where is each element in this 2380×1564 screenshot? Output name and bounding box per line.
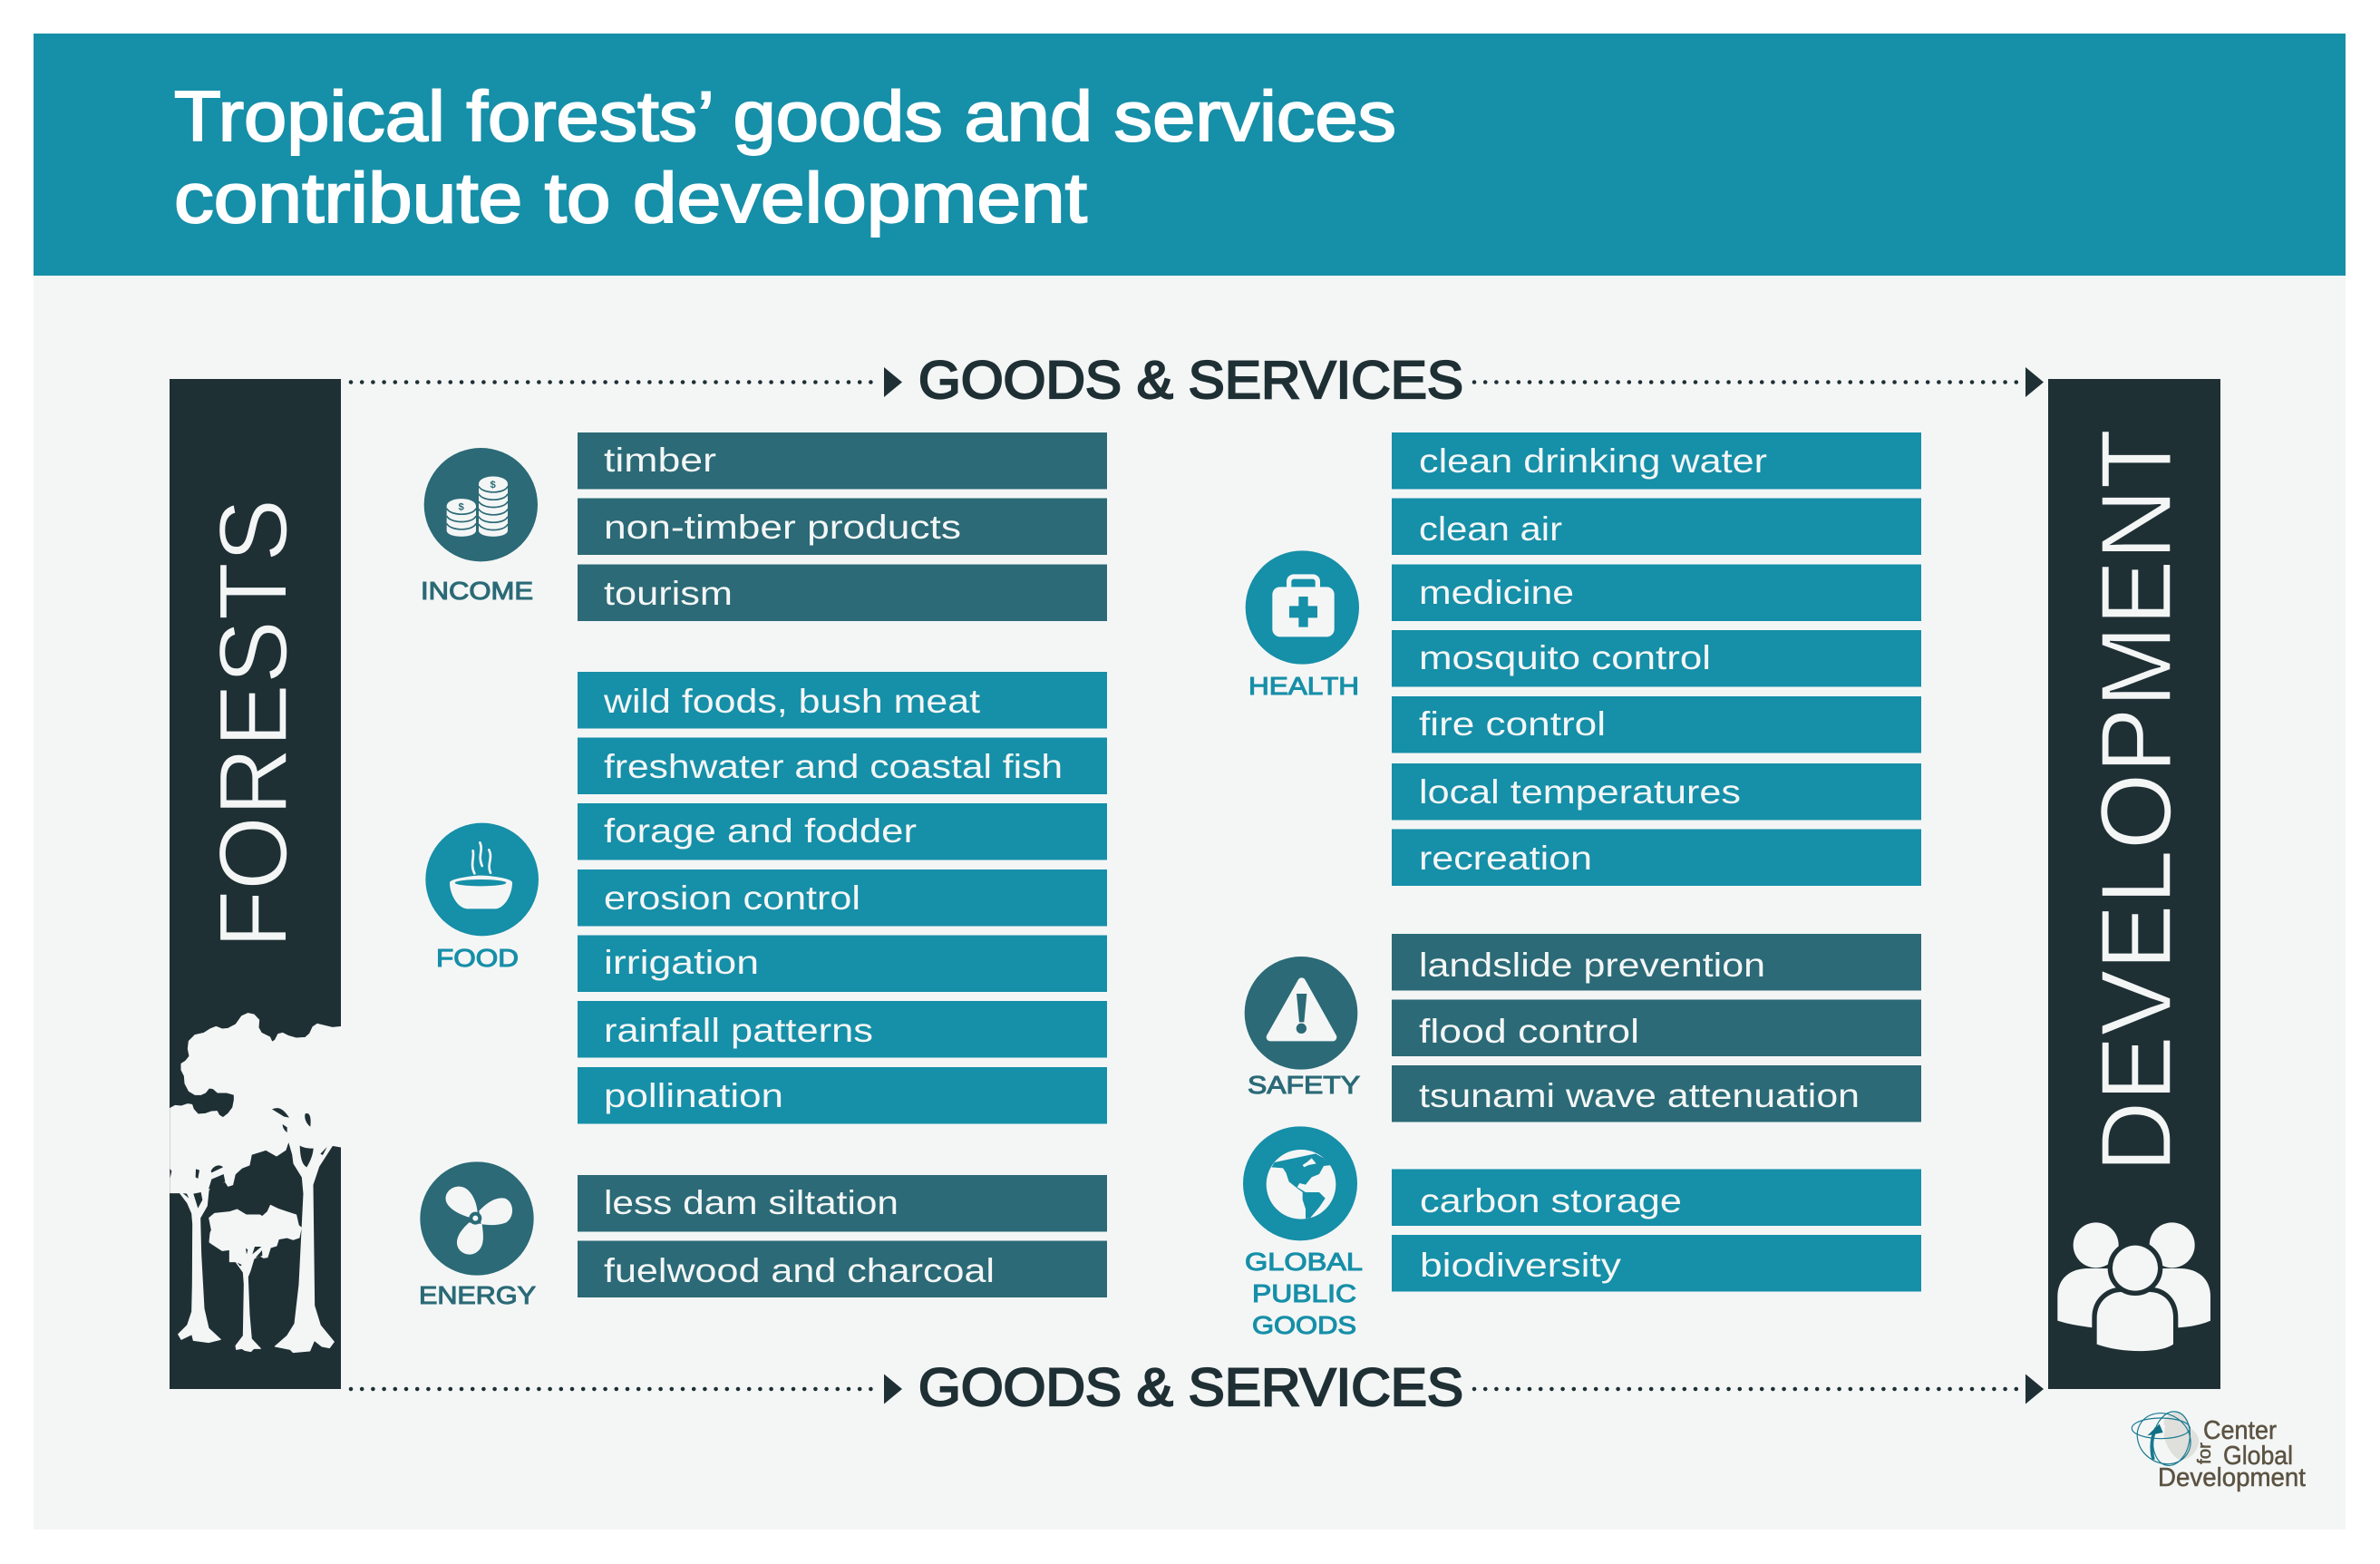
list: energy bars: fuelwood and charcoal: [604, 1252, 995, 1289]
list: health bars: local temperatures: [1419, 773, 1741, 811]
label: global public goods: GLOBAL: [1245, 1248, 1363, 1276]
logo mark: [2127, 1403, 2200, 1474]
list: food bars: irrigation: [604, 944, 759, 981]
label: global public goods: GOODS: [1252, 1311, 1356, 1339]
group: global public goods: [1243, 1126, 1363, 1339]
logo text: for: [2195, 1443, 2215, 1464]
group: energy: [419, 1161, 536, 1309]
logo text: [2158, 1416, 2306, 1492]
list: income bars: non-timber products: [604, 509, 961, 546]
list: food bars: [578, 672, 1107, 1124]
icon: fan: [420, 1161, 534, 1276]
icon: warning triangle: [1245, 957, 1357, 1070]
list: health bars: clean air: [1419, 510, 1562, 548]
list: health bars: mosquito control: [1419, 639, 1711, 676]
icon: coins: $: [459, 501, 465, 512]
icon: trees: [170, 1014, 342, 1353]
logo text: Center: [2203, 1416, 2277, 1445]
list: energy bars: less dam siltation: [604, 1184, 899, 1221]
bottom arrow: goods and services: [351, 1358, 2044, 1417]
label: health: HEALTH: [1248, 672, 1359, 700]
list: food bars: freshwater and coastal fish: [604, 748, 1063, 785]
title: contribute to development: [174, 158, 1087, 238]
list: global public goods bars: carbon storage: [1420, 1182, 1682, 1219]
list: safety bars: [1392, 934, 1921, 1122]
label: income: INCOME: [421, 577, 533, 605]
logo text: Development: [2158, 1463, 2306, 1492]
logo text: Global: [2223, 1442, 2293, 1471]
bottom arrow: goods and services: GOODS & SERVICES: [918, 1358, 1463, 1417]
list: income bars: timber: [604, 442, 716, 479]
group: health: [1246, 550, 1359, 700]
icon: coins: [424, 448, 538, 561]
label: safety: SAFETY: [1248, 1071, 1360, 1099]
title: [174, 76, 1396, 238]
icon: coins: $: [491, 480, 497, 491]
list: food bars: wild foods, bush meat: [603, 683, 981, 720]
list: income bars: tourism: [604, 575, 733, 612]
list: safety bars: flood control: [1419, 1013, 1639, 1050]
label: global public goods: PUBLIC: [1252, 1279, 1356, 1307]
icon: people: [2057, 1222, 2210, 1351]
group: food: [425, 823, 539, 972]
top arrow: goods and services: GOODS & SERVICES: [918, 351, 1463, 410]
group: safety: [1245, 957, 1360, 1099]
label: energy: ENERGY: [419, 1281, 536, 1309]
top arrow: goods and services: [351, 351, 2044, 410]
list: health bars: clean drinking water: [1419, 442, 1767, 480]
list: food bars: forage and fodder: [604, 812, 917, 850]
group: income: [421, 448, 538, 605]
list: global public goods bars: biodiversity: [1420, 1247, 1622, 1284]
list: income bars: [578, 432, 1107, 621]
title: Tropical forests’ goods and services: [174, 76, 1396, 156]
list: global public goods bars: [1392, 1170, 1921, 1291]
list: health bars: recreation: [1419, 840, 1592, 877]
icon: bowl: [425, 823, 539, 936]
list: health bars: fire control: [1419, 705, 1606, 743]
list: health bars: medicine: [1419, 574, 1574, 611]
list: safety bars: landslide prevention: [1419, 947, 1765, 984]
panel: forests column: [170, 379, 341, 1389]
list: health bars: [1392, 432, 1921, 886]
list: food bars: pollination: [604, 1077, 783, 1114]
label: global public goods: [1245, 1248, 1363, 1339]
logo: center for global development: [2127, 1403, 2306, 1492]
list: food bars: erosion control: [604, 879, 860, 917]
list: food bars: rainfall patterns: [604, 1012, 873, 1049]
development heading: DEVELOPMENT: [2081, 429, 2192, 1172]
icon: medical kit: [1246, 550, 1359, 665]
panel: development column: [2048, 379, 2220, 1389]
header band: [34, 34, 2346, 276]
list: energy bars: [578, 1175, 1107, 1297]
label: food: FOOD: [436, 944, 519, 972]
forests heading: FORESTS: [199, 499, 307, 948]
list: safety bars: tsunami wave attenuation: [1419, 1077, 1860, 1114]
icon: globe: [1243, 1126, 1357, 1240]
